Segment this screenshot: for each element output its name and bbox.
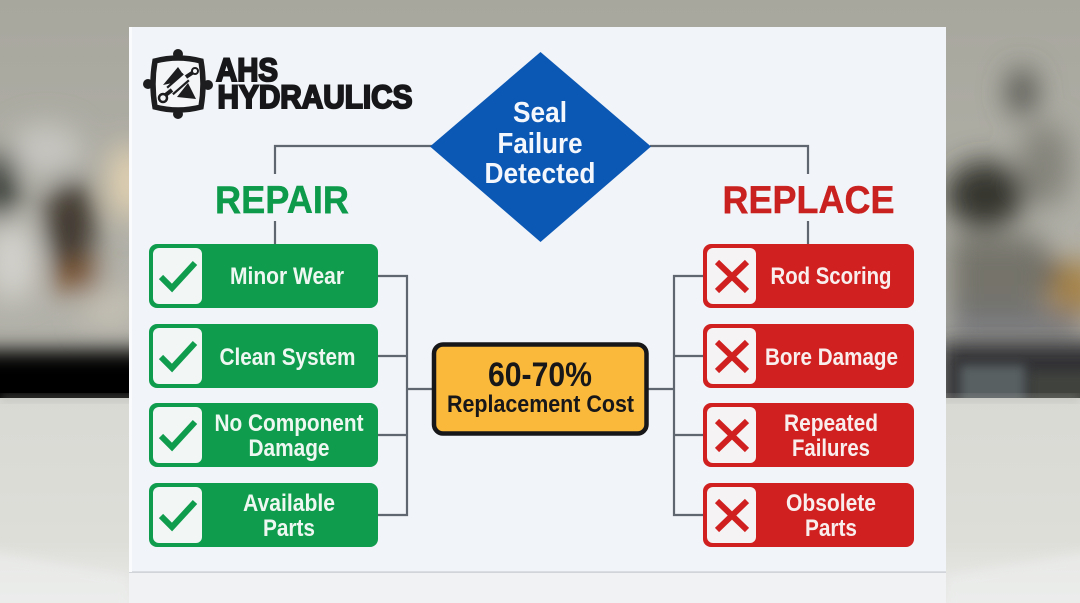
- center callout: cost threshold: Replacement Cost: [447, 391, 634, 418]
- logo wordmark: AHS: [216, 52, 278, 88]
- item: no component damage: [149, 403, 378, 467]
- item: no component damage: Damage: [248, 435, 330, 462]
- flow connectors: [275, 146, 808, 515]
- item: repeated failures: Repeated: [784, 410, 878, 437]
- item: obsolete parts: Parts: [805, 515, 857, 542]
- center callout: cost threshold: 60-70%: [488, 356, 592, 394]
- item: clean system: [149, 324, 378, 388]
- item: clean system: Clean System: [220, 344, 356, 371]
- decision diamond: [430, 52, 651, 242]
- center callout: cost threshold: [434, 344, 646, 434]
- logo wordmark: HYDRAULICS: [218, 79, 412, 115]
- diamond text: Seal: [513, 97, 567, 129]
- item: rod scoring: Rod Scoring: [770, 263, 892, 290]
- heading: replace: REPLACE: [722, 179, 894, 222]
- diamond text: Detected: [484, 158, 596, 190]
- item: bore damage: [703, 324, 914, 388]
- logo: AHS Hydraulics: [143, 49, 412, 119]
- diamond text: Failure: [498, 128, 582, 160]
- item: repeated failures: Failures: [792, 435, 870, 462]
- item: bore damage: Bore Damage: [765, 344, 898, 371]
- item: minor wear: Minor Wear: [230, 263, 344, 290]
- repair column: [149, 244, 378, 547]
- replace column: [703, 244, 914, 547]
- item: available parts: Parts: [263, 515, 315, 542]
- item: rod scoring: [703, 244, 914, 308]
- item: obsolete parts: [703, 483, 914, 547]
- diamond text: [484, 97, 596, 190]
- logo wordmark: [216, 52, 412, 115]
- white card panel: [129, 27, 946, 573]
- logo icon: hydraulic cylinder: [143, 49, 213, 119]
- item: available parts: [149, 483, 378, 547]
- item: obsolete parts: Obsolete: [786, 490, 876, 517]
- heading: repair: REPAIR: [215, 179, 349, 222]
- item: minor wear: [149, 244, 378, 308]
- item: repeated failures: [703, 403, 914, 467]
- item: no component damage: No Component: [214, 410, 364, 437]
- item: available parts: Available: [243, 490, 335, 517]
